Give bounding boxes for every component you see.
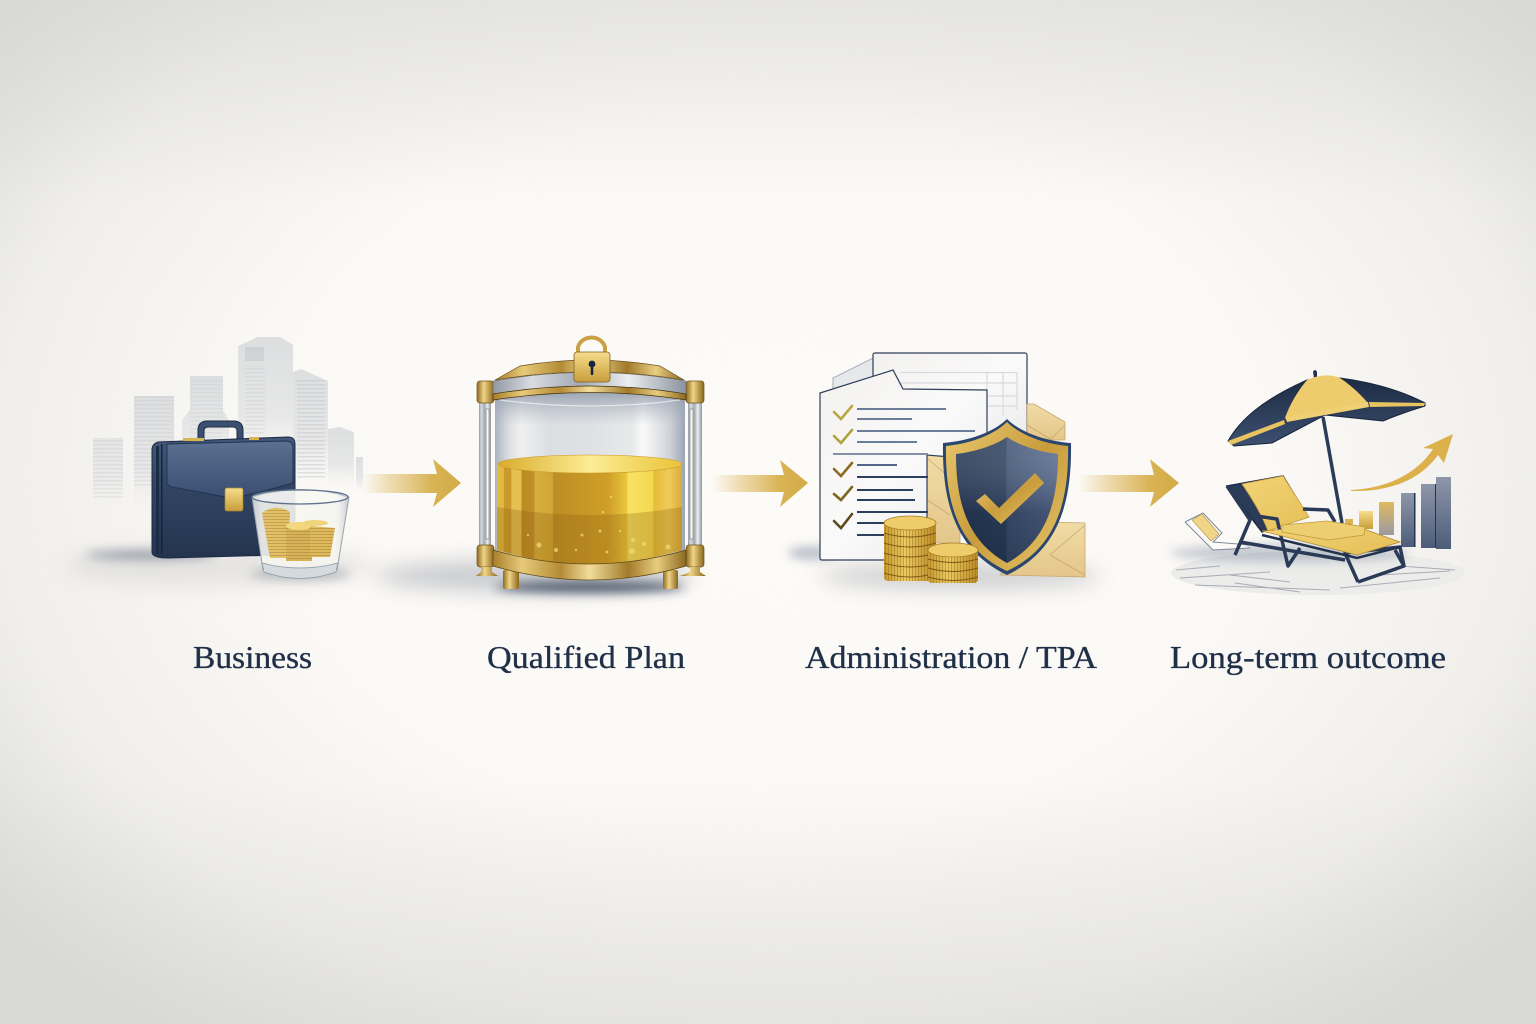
checklist document <box>820 370 987 560</box>
chair back frame <box>1227 476 1308 532</box>
gold rim <box>493 386 686 400</box>
check mark <box>976 473 1044 524</box>
icon: bar chart <box>1345 477 1451 549</box>
label: Qualified Plan: Qualified Plan <box>487 639 685 675</box>
umbrella pole <box>1323 417 1342 523</box>
back document <box>833 353 1027 473</box>
icon: umbrella <box>1228 370 1425 446</box>
ground shadow <box>65 546 375 586</box>
icon: growth arrow <box>1351 434 1453 491</box>
jar shadow <box>375 560 695 592</box>
city skyline <box>93 337 363 516</box>
base ring <box>493 550 686 580</box>
envelopes <box>927 404 1085 577</box>
arrow: Business to Qualified Plan <box>362 459 461 507</box>
panel: Qualified Plan <box>375 337 706 593</box>
gold liquid <box>497 455 682 564</box>
icon: small far chair <box>1185 513 1250 550</box>
seat rail <box>1262 535 1400 558</box>
lid dome <box>495 360 684 380</box>
glass cylinder <box>495 392 685 562</box>
panel: Administration / TPA <box>788 353 1100 590</box>
silver band <box>493 372 686 394</box>
label: Long-term outcome: Long-term outcome <box>1170 639 1446 675</box>
icon: coin stack short <box>928 543 978 583</box>
sand ground <box>1170 544 1465 595</box>
arrow: Administration to Long-term outcome <box>1078 459 1179 507</box>
right pillar <box>680 381 706 576</box>
icon: briefcase <box>152 421 295 558</box>
frame rails <box>1227 486 1404 582</box>
arrow: Qualified Plan to Administration <box>712 460 808 507</box>
text lines <box>833 409 975 535</box>
panel: Business <box>65 337 375 586</box>
panel: Long-term outcome <box>1170 370 1465 595</box>
icon: shield <box>943 419 1071 575</box>
glass shadow <box>250 568 350 580</box>
doc shadow <box>788 546 836 560</box>
jar under shadow <box>495 581 685 593</box>
icon: glass of coins <box>252 490 349 578</box>
icon: coin stack tall <box>884 516 936 581</box>
feet <box>503 570 678 589</box>
icon: padlock <box>574 337 610 382</box>
left pillar <box>476 381 498 576</box>
seat pad <box>1282 521 1365 540</box>
back cushion <box>1242 476 1309 531</box>
label: Administration / TPA: Administration / TPA <box>805 639 1097 675</box>
seat cushion <box>1262 524 1400 555</box>
label: Business: Business <box>193 639 312 675</box>
icon: lounge chair <box>1227 476 1404 582</box>
gold coin stacks <box>262 508 335 561</box>
briefcase shadow <box>85 550 215 560</box>
shadows <box>820 562 1100 590</box>
check marks <box>834 406 852 528</box>
